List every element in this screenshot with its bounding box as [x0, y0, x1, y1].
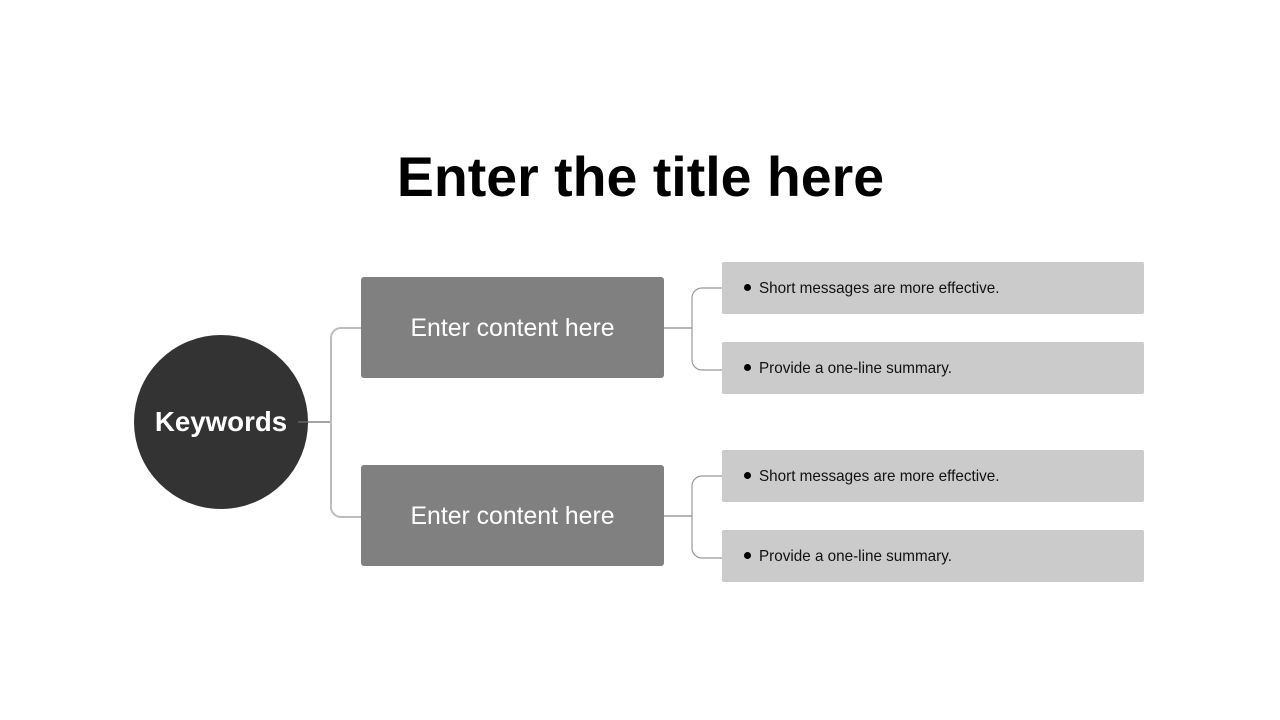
keyword circle	[134, 335, 308, 509]
message 2-2	[722, 530, 1144, 582]
content box 1	[361, 277, 664, 378]
content box 1: Enter content here	[410, 315, 615, 342]
keyword circle: Keywords	[155, 406, 287, 437]
title: Enter the title here	[397, 146, 884, 208]
message 1-1	[722, 262, 1144, 314]
message 1-2: Provide a one-line summary.	[759, 360, 952, 377]
message 2-1: Short messages are more effective.	[759, 468, 999, 485]
content box 2	[361, 465, 664, 566]
content box 2: Enter content here	[410, 503, 615, 530]
message 2-2: Provide a one-line summary.	[759, 548, 952, 565]
message 2-1	[722, 450, 1144, 502]
message 1-1: Short messages are more effective.	[759, 280, 999, 297]
message 1-2	[722, 342, 1144, 394]
